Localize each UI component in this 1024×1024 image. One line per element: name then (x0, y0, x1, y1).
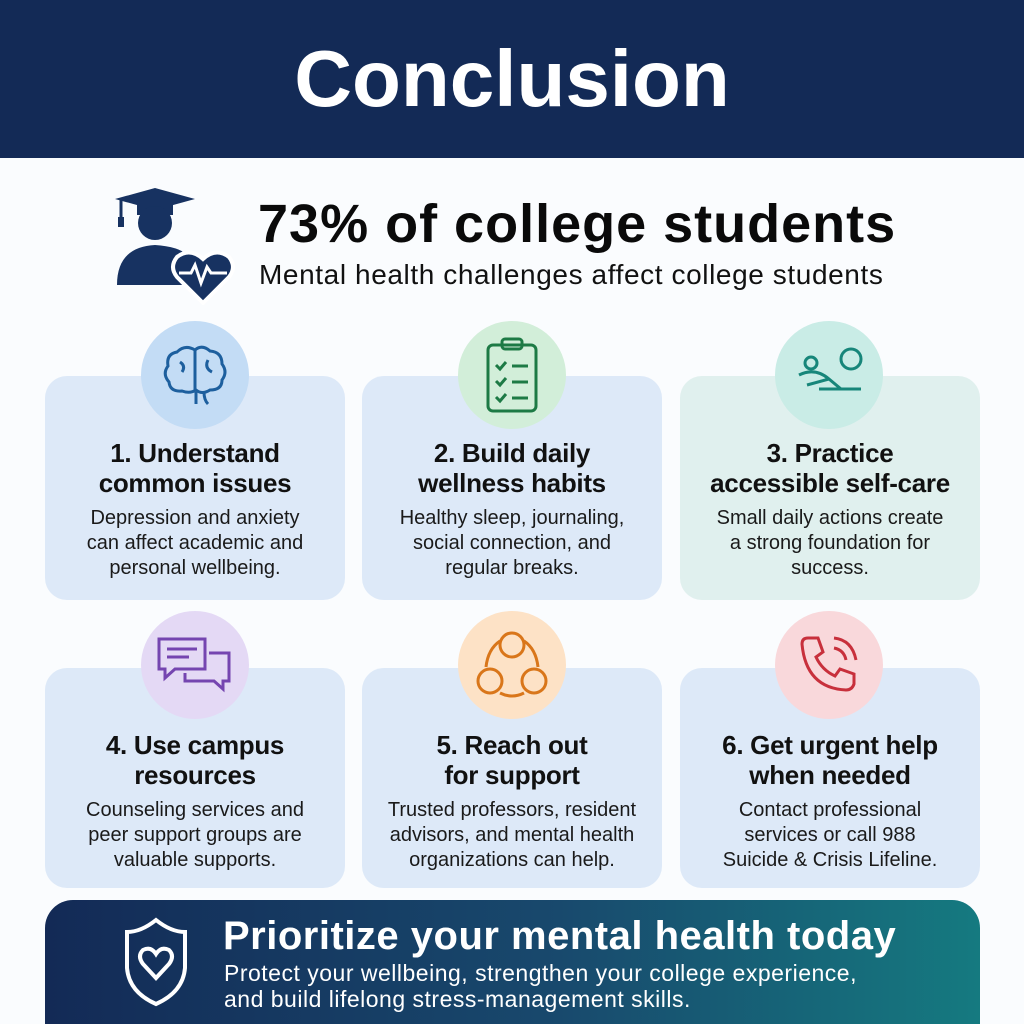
panel: campus resources: resources (134, 760, 256, 790)
panel: self-care: success. (791, 557, 869, 579)
stat block (115, 188, 896, 300)
panel: self-care: a strong foundation for (730, 532, 930, 554)
panel: understand: common issues (99, 468, 291, 498)
panel: understand: Depression and anxiety (90, 507, 300, 529)
icon: chat bubbles (141, 611, 249, 719)
panel: campus resources: 4. Use campus (106, 730, 284, 760)
panel: campus resources: Counseling services and (86, 799, 304, 821)
panel: habits: 2. Build daily (434, 438, 590, 468)
icon: checklist (458, 321, 566, 429)
header title (0, 0, 1024, 158)
panel: habits: social connection, and (413, 532, 611, 554)
panel: urgent help: services or call 988 (744, 824, 916, 846)
banner text (224, 960, 857, 1012)
panel: understand: can affect academic and (87, 532, 303, 554)
panel: urgent help: 6. Get urgent help (722, 730, 938, 760)
banner heading: Prioritize your mental health today (223, 914, 896, 958)
panel: reach out: organizations can help. (409, 849, 615, 871)
panel: campus resources (45, 668, 345, 888)
banner text: and build lifelong stress-management skills. (224, 986, 691, 1012)
panel: urgent help: when needed (749, 760, 911, 790)
panel: self-care: Small daily actions create (717, 507, 943, 529)
panel: reach out: Trusted professors, resident (388, 799, 636, 821)
header title: Conclusion (294, 34, 730, 123)
panel: understand (45, 376, 345, 600)
icon: people network (458, 611, 566, 719)
panel: reach out: advisors, and mental health (390, 824, 634, 846)
panel: self-care (680, 376, 980, 600)
stat subtitle: Mental health challenges affect college students (259, 259, 883, 290)
panel: understand: 1. Understand (110, 438, 280, 468)
icon: shield heart (125, 918, 187, 1006)
panel: urgent help: Suicide & Crisis Lifeline. (723, 849, 937, 871)
panel: urgent help (680, 668, 980, 888)
icon: brain (141, 321, 249, 429)
panel: campus resources: valuable supports. (114, 849, 276, 871)
icon: phone (775, 611, 883, 719)
panel: self-care: 3. Practice (767, 438, 893, 468)
panel: habits: wellness habits (418, 468, 606, 498)
panel: habits (362, 376, 662, 600)
icon: student with heart (115, 188, 231, 300)
panel: habits: regular breaks. (445, 557, 579, 579)
panel: campus resources: peer support groups are (88, 824, 302, 846)
banner text: Protect your wellbeing, strengthen your college experience, (224, 960, 857, 986)
banner: prioritize (45, 900, 980, 1024)
icon: relaxing person (775, 321, 883, 429)
panel: reach out: 5. Reach out (436, 730, 588, 760)
panel: habits: Healthy sleep, journaling, (400, 507, 624, 529)
panel: urgent help: Contact professional (739, 799, 921, 821)
panel: reach out: for support (444, 760, 580, 790)
headline stat: 73% of college students (258, 194, 896, 254)
panel: understand: personal wellbeing. (109, 557, 281, 579)
panel: reach out (362, 668, 662, 888)
panel: self-care: accessible self-care (710, 468, 950, 498)
